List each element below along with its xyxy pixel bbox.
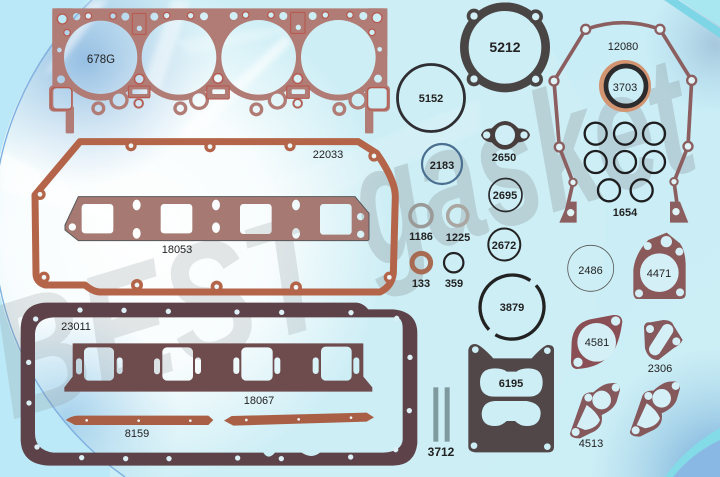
label: 23011: 23011 bbox=[61, 321, 91, 333]
label: 1186: 1186 bbox=[409, 231, 433, 243]
label: 359: 359 bbox=[445, 278, 463, 290]
panel: exhaust manifold gasket 18067 bbox=[64, 343, 372, 392]
label: 3712: 3712 bbox=[428, 445, 455, 459]
part: 2183 ring bbox=[422, 144, 462, 184]
part: 5212 cover gasket bbox=[464, 7, 546, 88]
part: 2672 ring bbox=[488, 228, 520, 260]
part: 133 washer bbox=[412, 253, 431, 272]
label: 2486: 2486 bbox=[578, 265, 603, 277]
label: 18053: 18053 bbox=[162, 244, 192, 256]
label: 8159: 8159 bbox=[125, 428, 149, 440]
watermark: BEST gasket bbox=[0, 62, 696, 420]
label: 4581: 4581 bbox=[585, 337, 609, 349]
label: 2306: 2306 bbox=[648, 363, 672, 375]
panel: oil pan gasket 23011 bbox=[21, 303, 417, 466]
panel: intake manifold gasket 18053 bbox=[65, 197, 369, 241]
panel: cork strips 8159 bbox=[66, 413, 374, 426]
label: 3703: 3703 bbox=[613, 82, 637, 94]
part: 3879 split ring bbox=[480, 275, 544, 339]
part: 4513 gasket left bbox=[570, 383, 620, 438]
part: 2486 ring bbox=[568, 245, 614, 291]
part: 5152 ring bbox=[398, 64, 464, 132]
label: 2183: 2183 bbox=[430, 160, 454, 172]
part: 3703 seal bbox=[602, 63, 648, 109]
label: 2650: 2650 bbox=[492, 152, 516, 164]
label: 4471: 4471 bbox=[647, 268, 671, 280]
part: 2650 flange gasket bbox=[481, 121, 530, 150]
part: 4513 gasket right bbox=[630, 381, 680, 437]
label: 2672: 2672 bbox=[492, 240, 516, 252]
part: 6195 carburetor gasket bbox=[468, 344, 554, 452]
label: 6195: 6195 bbox=[499, 378, 523, 390]
label: 1225: 1225 bbox=[446, 232, 470, 244]
part: 1654 o-rings bbox=[585, 123, 665, 201]
label: 2695: 2695 bbox=[493, 190, 517, 202]
part: 2695 ring bbox=[489, 178, 522, 212]
label: 12080: 12080 bbox=[608, 41, 638, 53]
label: 22033: 22033 bbox=[313, 149, 343, 161]
part: 3712 strips bbox=[433, 387, 450, 442]
part: 4581 gasket bbox=[571, 315, 622, 369]
label: 133: 133 bbox=[412, 278, 430, 290]
part: 2306 gasket bbox=[644, 320, 683, 360]
label: 5212: 5212 bbox=[489, 39, 521, 55]
part: 359 ring bbox=[444, 253, 463, 272]
label: 678G: 678G bbox=[87, 54, 115, 66]
label: 18067: 18067 bbox=[244, 395, 274, 407]
label: 5152: 5152 bbox=[419, 93, 443, 105]
label: 4513: 4513 bbox=[579, 438, 603, 450]
part: 1225 washer bbox=[448, 206, 468, 226]
part: 12080 timing cover gasket bbox=[548, 23, 697, 223]
label: 3879: 3879 bbox=[500, 302, 524, 314]
panel: cylinder head gasket 678G bbox=[49, 8, 390, 133]
part: 4471 gasket bbox=[633, 233, 686, 299]
panel: valve cover gasket 22033 bbox=[34, 140, 395, 293]
part: 1186 washer bbox=[410, 205, 432, 227]
label: 1654: 1654 bbox=[613, 207, 638, 219]
